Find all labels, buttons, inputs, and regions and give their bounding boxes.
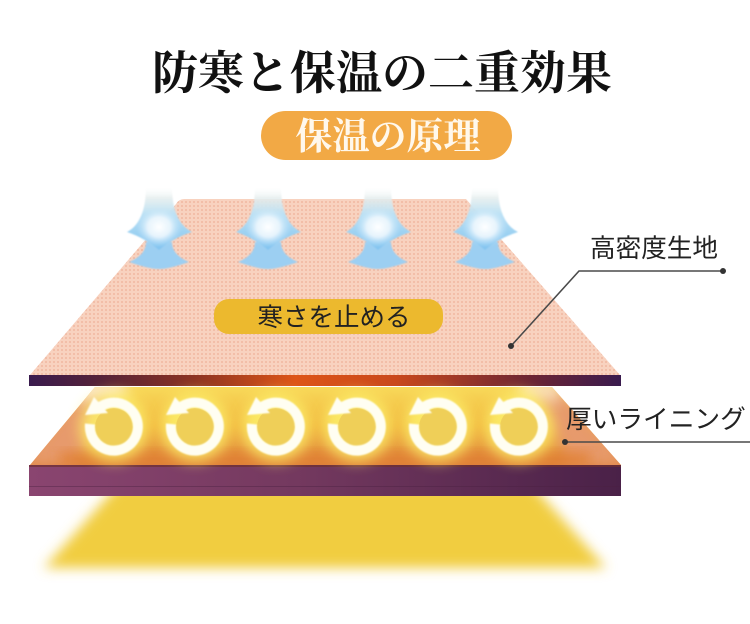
icon: cold arrow 4 (453, 186, 518, 269)
icon: ring 1 (80, 393, 148, 461)
icon: ring 2 (161, 393, 229, 461)
icon: ring 6 (485, 393, 553, 461)
icon: ring 5 (404, 393, 472, 461)
subtitle pill (261, 111, 512, 160)
label: thick lining with leader (562, 405, 750, 445)
icon: cold arrow 1 (127, 186, 192, 269)
subtitle pill: 保温の原理 (296, 116, 480, 158)
callout: stop the cold (214, 299, 443, 334)
icon: ring 4 (323, 393, 391, 461)
warm glow below lining (44, 485, 606, 568)
icon: cold arrow 3 (346, 186, 411, 269)
panel: high density fabric layer (29, 199, 621, 386)
panel: thick lining layer (20, 380, 630, 496)
icon: cold arrow 2 (236, 186, 301, 269)
label: thick lining with leader: 厚いライニング (566, 405, 746, 434)
icons: heat circulation rings (80, 393, 553, 461)
callout: stop the cold: 寒さを止める (257, 304, 411, 332)
title: 防寒と保温の二重効果 (152, 48, 612, 99)
icons: cold air arrows (127, 186, 518, 269)
label: high density fabric with leader: 高密度生地 (590, 234, 718, 263)
icon: ring 3 (242, 393, 310, 461)
label: high density fabric with leader (508, 234, 726, 349)
